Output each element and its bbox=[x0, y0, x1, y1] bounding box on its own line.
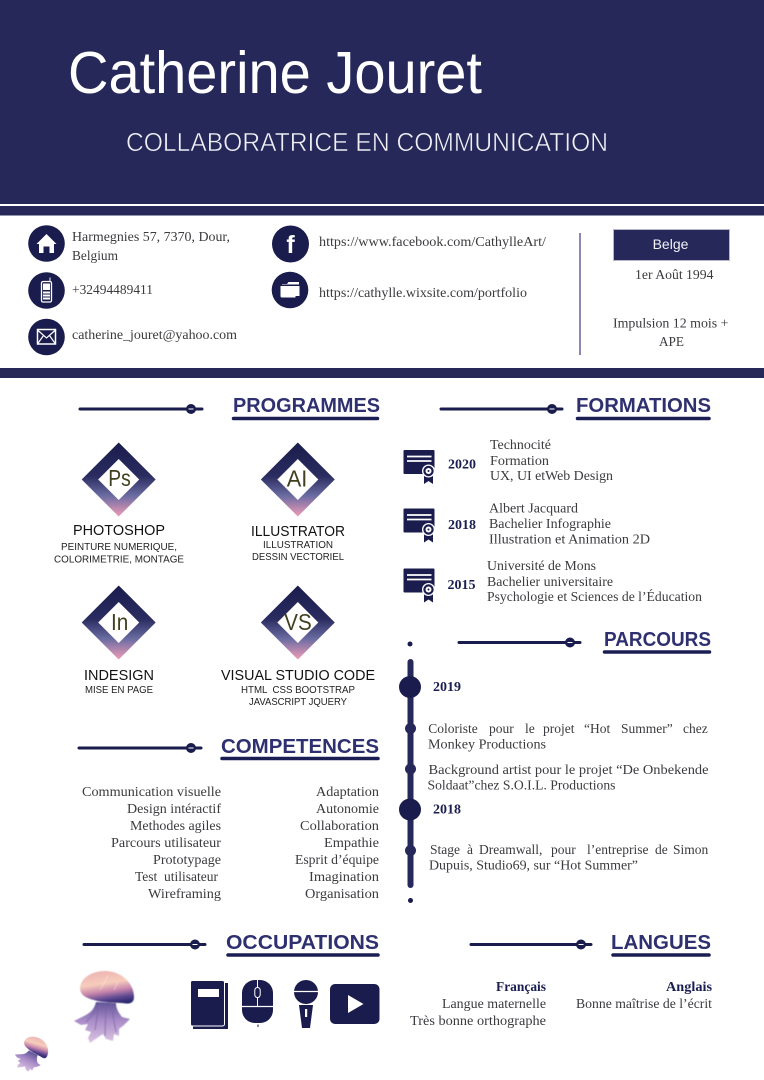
year 2018: 2018 bbox=[433, 802, 461, 816]
icon: diploma bbox=[404, 508, 435, 542]
icon: play button bbox=[330, 984, 380, 1024]
icon: facebook bbox=[272, 226, 309, 262]
heading: parcours bbox=[459, 628, 711, 652]
skills list right: Empathie bbox=[324, 835, 379, 850]
skill: illustrator: ILLUSTRATOR bbox=[251, 523, 345, 540]
job: coloriste: Coloriste bbox=[428, 721, 478, 736]
job: background artist: Background artist pour le projet “De Onbekende bbox=[428, 762, 708, 777]
job: coloriste: projet bbox=[543, 721, 575, 736]
entry: 2015: Bachelier universitaire bbox=[487, 574, 613, 589]
icon: mail bbox=[28, 319, 65, 355]
entry: 2015: Psychologie et Sciences de l’Éducation bbox=[487, 589, 702, 604]
entry: 2018 bbox=[404, 500, 650, 546]
job: coloriste: pour bbox=[489, 721, 514, 736]
skill: illustrator: DESSIN VECTORIEL bbox=[252, 552, 344, 563]
skill: photoshop bbox=[54, 442, 184, 566]
skill: photoshop: Ps bbox=[108, 465, 131, 491]
entry: 2018: 2018 bbox=[448, 517, 476, 532]
job: stage: Dreamwall, bbox=[479, 842, 542, 857]
icon: diploma bbox=[404, 450, 435, 484]
skills list left: Parcours utilisateur bbox=[111, 835, 222, 850]
heading: programmes: PROGRAMMES bbox=[233, 394, 380, 417]
heading: formations bbox=[441, 394, 711, 418]
language: french bbox=[410, 979, 546, 1028]
skill: visual studio code bbox=[221, 586, 375, 708]
entry: 2015 bbox=[404, 558, 702, 604]
contract note: Impulsion 12 mois + bbox=[613, 316, 728, 330]
skill: indesign bbox=[82, 586, 156, 696]
panel: competences bbox=[79, 735, 379, 901]
contract note bbox=[613, 316, 728, 349]
job: stage bbox=[429, 842, 709, 872]
icon: microphone bbox=[294, 980, 318, 1028]
language: french: Très bonne orthographe bbox=[410, 1013, 546, 1028]
job: coloriste bbox=[428, 721, 708, 752]
contract note: APE bbox=[659, 334, 684, 349]
heading: formations: FORMATIONS bbox=[576, 394, 711, 417]
birth date: 1er Août 1994 bbox=[635, 267, 714, 282]
icon: mouse bbox=[242, 980, 273, 1027]
job: stage: à bbox=[467, 842, 473, 857]
language: english bbox=[576, 979, 712, 1011]
entry: 2015: 2015 bbox=[448, 577, 476, 592]
skill: illustrator: AI bbox=[287, 466, 307, 492]
portfolio link: https://cathylle.wixsite.com/portfolio bbox=[319, 285, 527, 300]
language: french: Français bbox=[496, 979, 546, 994]
heading: occupations bbox=[84, 931, 379, 955]
heading: occupations: OCCUPATIONS bbox=[226, 931, 379, 954]
panel: formations bbox=[404, 394, 711, 604]
skill: indesign: In bbox=[111, 609, 128, 635]
jellyfish small bbox=[10, 1032, 53, 1077]
skills list right: Autonomie bbox=[316, 801, 379, 816]
language: english: Bonne maîtrise de l’écrit bbox=[576, 996, 712, 1011]
job: stage: Dupuis, Studio69, sur “Hot Summer” bbox=[429, 858, 638, 872]
facebook link: https://www.facebook.com/CathylleArt/ bbox=[319, 234, 546, 249]
entry: 2018: Illustration et Animation 2D bbox=[489, 532, 650, 546]
address bbox=[72, 229, 230, 263]
skills list right: Adaptation bbox=[316, 784, 379, 799]
job: coloriste: “Hot bbox=[584, 721, 610, 736]
icon: folder bbox=[272, 272, 308, 308]
address: Belgium bbox=[72, 248, 118, 263]
job: stage: Simon bbox=[673, 842, 709, 857]
skills list left: Test bbox=[135, 869, 158, 884]
entry: 2020: Technocité bbox=[490, 437, 551, 452]
heading: competences bbox=[79, 735, 379, 758]
job: stage: pour bbox=[551, 842, 576, 857]
panel: parcours bbox=[399, 628, 711, 903]
skills list right: Collaboration bbox=[300, 818, 379, 833]
icon: book bbox=[190, 980, 228, 1029]
heading: competences: COMPETENCES bbox=[221, 735, 379, 758]
skill: visual studio code: HTML CSS BOOTSTRAP bbox=[241, 685, 355, 696]
skills list left: Wireframing bbox=[148, 886, 221, 901]
timeline bbox=[399, 642, 421, 903]
phone number: +32494489411 bbox=[72, 282, 153, 297]
panel: langues bbox=[410, 931, 712, 1028]
skills list right: Esprit d’équipe bbox=[295, 852, 379, 867]
language: english: Anglais bbox=[666, 979, 712, 994]
contact bottom band bbox=[0, 368, 764, 378]
heading: parcours: PARCOURS bbox=[604, 628, 711, 651]
job: background artist bbox=[428, 762, 708, 792]
entry: 2018: Bachelier Infographie bbox=[489, 516, 611, 531]
job: coloriste: le bbox=[525, 721, 535, 736]
panel: programmes bbox=[54, 394, 380, 708]
nationality badge: Belge bbox=[653, 236, 689, 252]
skills list left: Design intéractif bbox=[127, 801, 222, 816]
icon: home bbox=[28, 225, 65, 262]
heading: langues bbox=[471, 931, 711, 955]
contact panel bbox=[28, 225, 729, 355]
panel: occupations bbox=[10, 931, 379, 1077]
job: stage: l’entreprise bbox=[587, 842, 648, 857]
skill: photoshop: PHOTOSHOP bbox=[73, 522, 165, 539]
skill: illustrator: ILLUSTRATION bbox=[263, 540, 333, 551]
heading: langues: LANGUES bbox=[611, 931, 711, 954]
skill: visual studio code: VS bbox=[284, 609, 312, 635]
skill: indesign: INDESIGN bbox=[84, 667, 154, 684]
skill: photoshop: COLORIMETRIE, MONTAGE bbox=[54, 554, 184, 566]
skill: photoshop: PEINTURE NUMERIQUE, bbox=[61, 542, 177, 553]
icon: phone bbox=[28, 272, 65, 309]
job: stage: Stage bbox=[430, 842, 460, 857]
heading: programmes bbox=[80, 394, 380, 418]
skills list left: Communication visuelle bbox=[82, 784, 221, 799]
skill: visual studio code: JAVASCRIPT JQUERY bbox=[249, 697, 347, 708]
entry: 2020 bbox=[404, 437, 613, 484]
icon: facebook: f bbox=[286, 231, 295, 259]
skills list right: Organisation bbox=[305, 886, 379, 901]
skills list left: Prototypage bbox=[153, 852, 221, 867]
skills list left: utilisateur bbox=[164, 869, 218, 884]
entry: 2015: Université de Mons bbox=[487, 558, 596, 573]
entry: 2020: 2020 bbox=[448, 456, 476, 472]
job: background artist: Soldaat”chez S.O.I.L. Productions bbox=[428, 778, 616, 792]
address: Harmegnies 57, 7370, Dour, bbox=[72, 229, 230, 244]
entry: 2020: Formation bbox=[490, 453, 549, 468]
job: stage: de bbox=[655, 842, 668, 857]
skills list right: Imagination bbox=[309, 869, 379, 884]
skills list left bbox=[82, 784, 222, 901]
entry: 2020: UX, UI etWeb Design bbox=[490, 468, 613, 483]
job: coloriste: chez bbox=[683, 721, 708, 736]
year 2019: 2019 bbox=[433, 679, 461, 694]
skills list right bbox=[295, 784, 379, 901]
skills list left: Methodes agiles bbox=[130, 818, 221, 833]
name title: Catherine Jouret bbox=[68, 40, 482, 106]
skill: indesign: MISE EN PAGE bbox=[85, 685, 153, 696]
jellyfish large bbox=[74, 971, 134, 1043]
job: coloriste: Summer” bbox=[621, 721, 673, 736]
language: french: Langue maternelle bbox=[442, 996, 546, 1011]
email: catherine_jouret@yahoo.com bbox=[72, 327, 238, 342]
vertical divider bbox=[579, 233, 581, 355]
nationality badge bbox=[614, 230, 730, 260]
entry: 2018: Albert Jacquard bbox=[489, 500, 578, 516]
skill: visual studio code: VISUAL STUDIO CODE bbox=[221, 667, 375, 684]
skill: illustrator bbox=[251, 442, 345, 563]
icon: diploma bbox=[404, 568, 435, 602]
header band bbox=[0, 0, 764, 216]
job subtitle: COLLABORATRICE EN COMMUNICATION bbox=[126, 127, 608, 157]
job: coloriste: Monkey Productions bbox=[428, 736, 546, 752]
